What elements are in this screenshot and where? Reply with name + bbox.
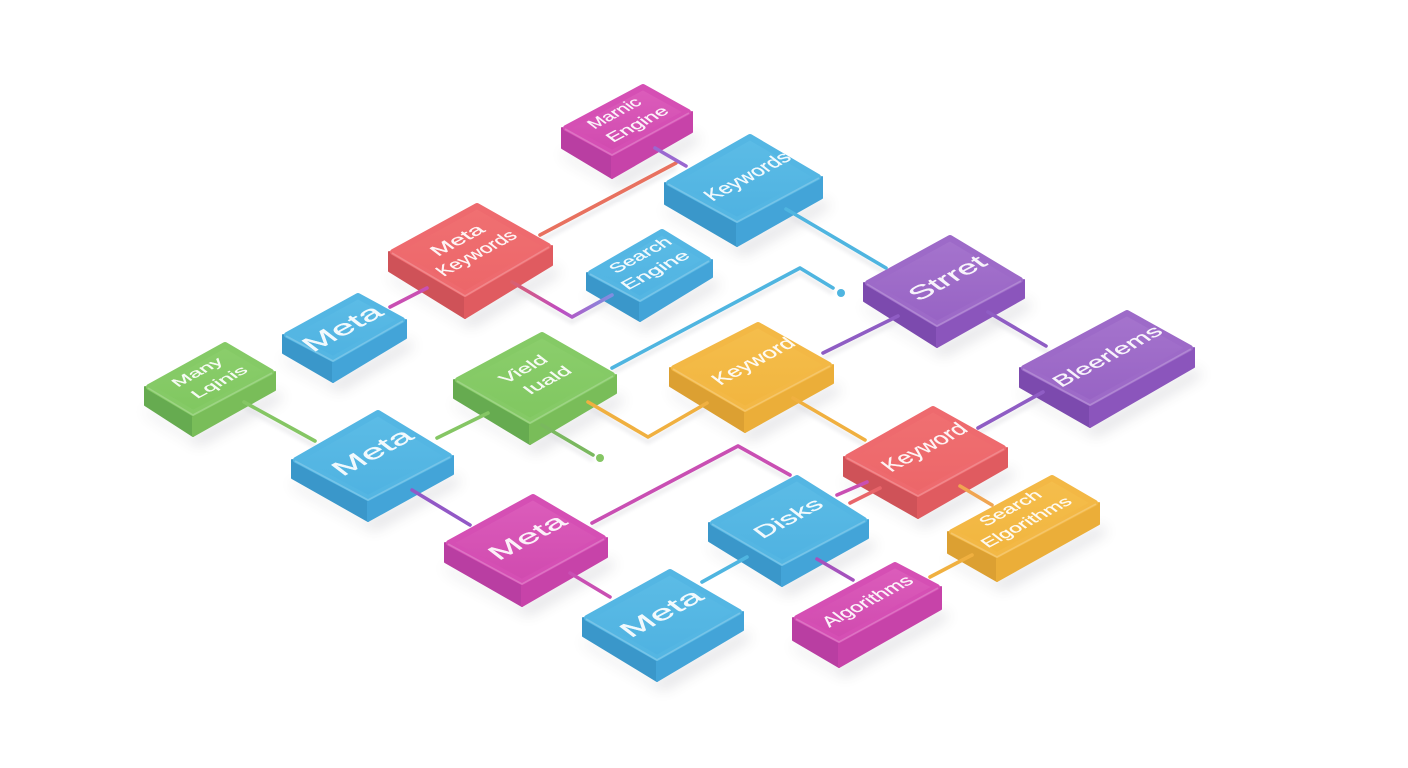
label: Search Elgorithms: Elgorithms <box>976 493 1076 551</box>
label: Many Lqinis: Many <box>168 355 228 390</box>
label: Many Lqinis: Lqinis <box>187 363 253 401</box>
label: Marnic Engine: Engine <box>601 103 673 145</box>
block: Meta (magenta) <box>445 497 607 606</box>
block: Disks <box>709 478 868 586</box>
block: Algorithms <box>793 565 941 667</box>
connector: Meta to Meta lower <box>570 573 610 597</box>
label: Meta Keywords: Meta <box>426 221 490 260</box>
connector: Meta Keywords to Keywords <box>540 163 676 235</box>
connector: Vield Iuald to Keyword <box>588 402 707 437</box>
connector: Meta to Meta <box>412 490 470 525</box>
connector: Meta to Disks <box>592 446 790 523</box>
connector: Marnic Engine to Keywords <box>655 148 686 166</box>
label: Disks: Disks <box>747 494 829 542</box>
block: Bleerlems <box>1020 313 1194 427</box>
label: Search Elgorithms: Search <box>974 487 1046 529</box>
connector: Disks to Algorithms <box>817 559 853 580</box>
connector: Vield Iuald to open endpoint <box>542 425 593 455</box>
block: Meta (centre left) <box>292 413 453 521</box>
connector: Disks to Keyword red <box>850 488 880 503</box>
connector: Meta to Vield Iuald <box>437 413 488 438</box>
endpoint dot: blue <box>837 289 845 297</box>
soft shadows beneath blocks and connectors <box>143 134 1202 690</box>
label: Strret: Strret <box>902 252 993 305</box>
block: Vield Iuald <box>454 335 616 444</box>
label: Marnic Engine <box>582 94 673 145</box>
label: Keyword: Keyword <box>875 419 973 475</box>
label: Vield Iuald: Vield <box>494 352 552 386</box>
label: Algorithms: Algorithms <box>817 573 918 631</box>
connector: Keywords to Strret <box>786 209 886 268</box>
connector: Keyword to Keyword <box>793 398 865 440</box>
label: Marnic Engine: Marnic <box>582 94 646 132</box>
block: Marnic Engine <box>562 87 692 178</box>
label: Search Engine <box>604 234 694 293</box>
label: Vield Iuald: Iuald <box>518 363 576 397</box>
block: Meta (bottom) <box>583 572 743 681</box>
block: Strret <box>864 238 1024 347</box>
label: Meta: Meta <box>324 424 420 480</box>
label: Vield Iuald <box>494 352 576 397</box>
connector: Meta to Disks lower <box>702 557 747 582</box>
label: Meta: Meta <box>613 584 710 642</box>
label: Search Engine: Engine <box>616 247 694 293</box>
block: Meta Keywords <box>389 206 552 318</box>
connector: Algorithms to Search Algorithms <box>930 555 972 577</box>
connector: Keyword to Strret <box>823 316 898 353</box>
block: Many Lqinis <box>145 345 275 436</box>
connector: Meta to Meta Keywords <box>390 288 427 307</box>
connector: Many Lqinis to Meta <box>244 402 315 441</box>
label: Many Lqinis <box>168 355 253 401</box>
label: Bleerlems: Bleerlems <box>1047 322 1168 391</box>
connector: Keyword to Search Algorithms <box>960 486 992 505</box>
label: Meta Keywords: Keywords <box>432 228 522 280</box>
block: Keywords <box>665 137 822 246</box>
label: Keyword: Keyword <box>707 334 801 389</box>
block: Keyword (yellow) <box>670 325 833 432</box>
block: Search Engine <box>587 232 712 321</box>
block: Meta (upper left) <box>283 296 406 382</box>
connector: Disks to Keyword magenta <box>837 482 867 495</box>
connector: Vield Iuald to open endpoint <box>612 268 833 368</box>
label: Meta: Meta <box>482 510 574 564</box>
connector: Meta Keywords to Search Engine <box>512 282 612 317</box>
block: Search Algorithms <box>948 478 1099 581</box>
block: Keyword (red) <box>844 409 1007 518</box>
endpoint dot: green <box>596 454 604 462</box>
connector: Keyword to Bleerlems <box>978 392 1043 428</box>
label: Keywords: Keywords <box>699 148 796 205</box>
label: Search Engine: Search <box>604 234 676 276</box>
connector: Strret to Bleerlems <box>988 312 1046 346</box>
connectors between blocks <box>244 148 1046 597</box>
label: Meta: Meta <box>295 300 390 356</box>
